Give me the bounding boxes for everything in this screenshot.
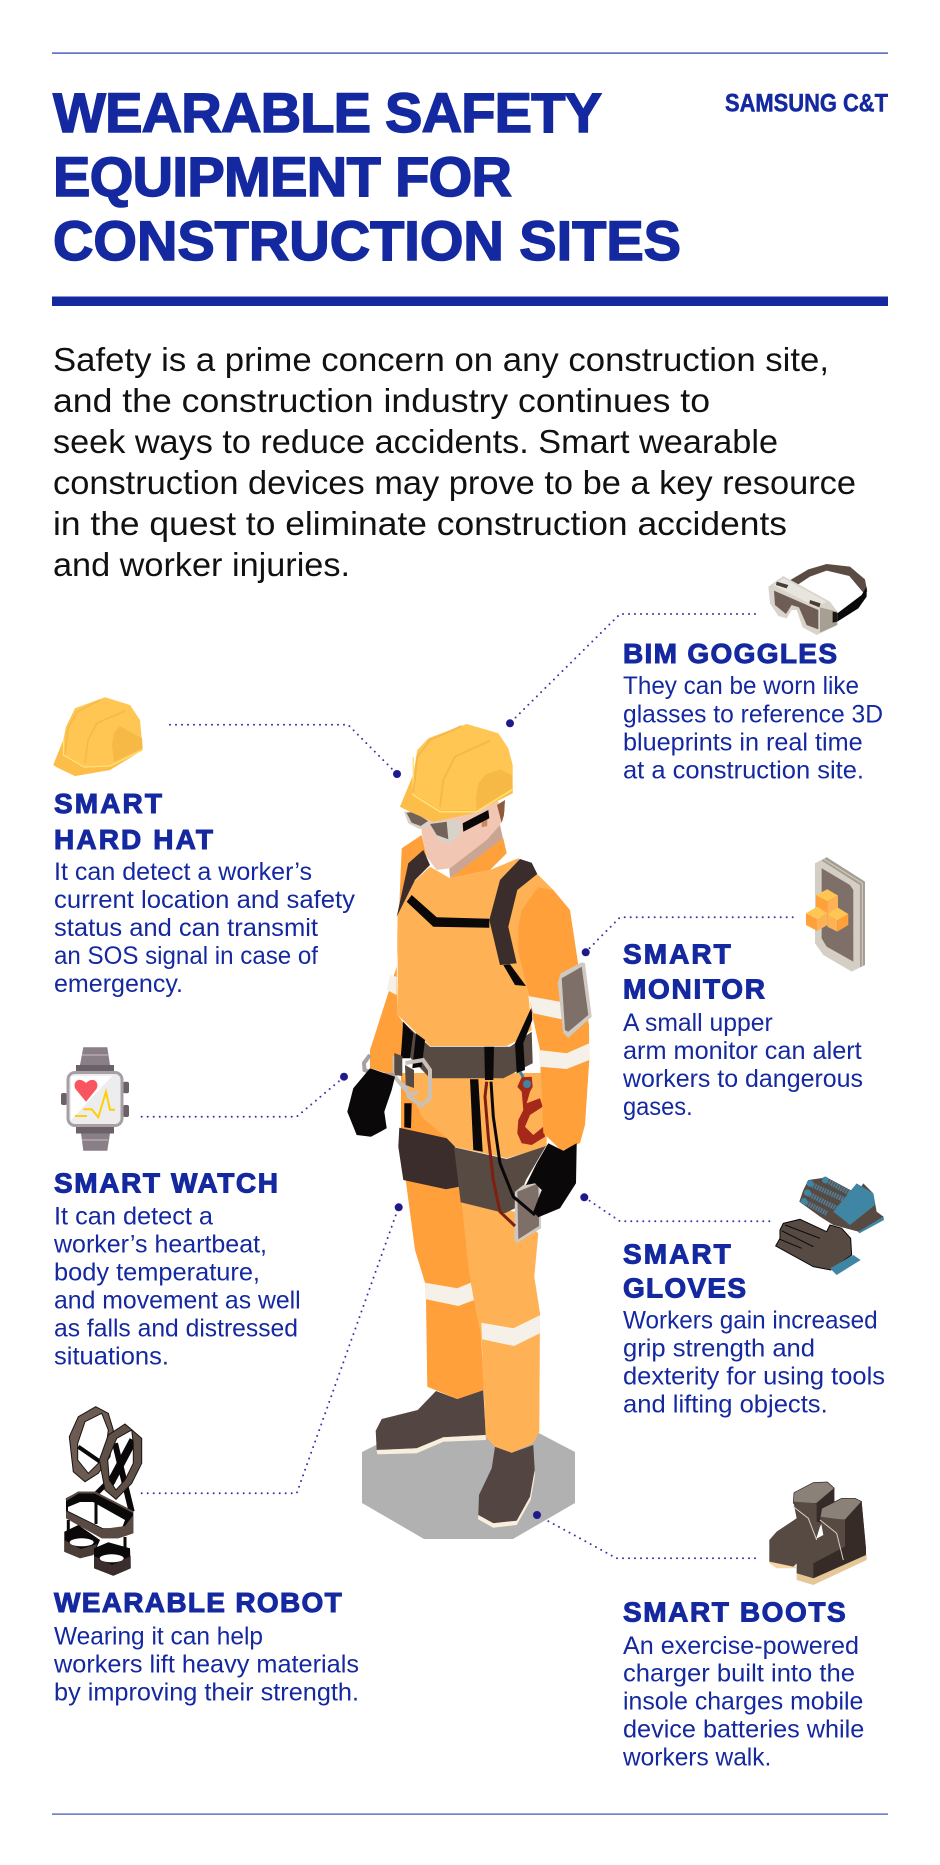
description: workers lift heavy materials <box>53 1650 359 1678</box>
torso vest <box>398 858 553 1046</box>
description: body temperature, <box>54 1258 260 1286</box>
description <box>622 1009 863 1121</box>
description: A small upper <box>623 1009 773 1037</box>
left boot <box>376 1390 486 1454</box>
description <box>53 1622 359 1706</box>
description: arm monitor can alert <box>623 1037 862 1065</box>
heading <box>623 938 765 1005</box>
intro text block: seek ways to reduce accidents. Smart wearable <box>53 423 778 460</box>
description: workers to dangerous <box>622 1065 863 1093</box>
heading: BIM GOGGLES <box>623 638 837 669</box>
title <box>53 81 681 272</box>
panel: smart watch <box>53 1047 301 1370</box>
description: as falls and distressed <box>54 1314 298 1342</box>
description: current location and safety <box>54 886 356 914</box>
description: workers walk. <box>622 1744 771 1772</box>
description: status and can transmit <box>54 914 318 942</box>
description: gases. <box>623 1093 693 1121</box>
heading: MONITOR <box>623 974 765 1005</box>
intro text block: Safety is a prime concern on any construction site, <box>53 341 829 378</box>
phone <box>514 1180 541 1243</box>
icon: hard hat <box>53 697 143 776</box>
panel: smart gloves <box>623 1177 885 1418</box>
right boot <box>478 1445 535 1528</box>
worn hard hat <box>400 724 513 822</box>
description <box>54 858 356 998</box>
description: device batteries while <box>623 1716 864 1744</box>
right leg <box>462 1202 540 1453</box>
right arm <box>518 887 589 1151</box>
title: EQUIPMENT FOR <box>53 145 512 208</box>
description: grip strength and <box>623 1334 815 1362</box>
description: glasses to reference 3D <box>623 700 883 728</box>
description: An exercise-powered <box>623 1632 859 1660</box>
carabiners <box>394 1053 430 1106</box>
description <box>53 1202 301 1370</box>
description: and movement as well <box>54 1286 301 1314</box>
panel: wearable robot <box>53 1407 359 1706</box>
description: They can be worn like <box>623 672 859 700</box>
heading: SMART <box>623 1238 731 1269</box>
description <box>622 1632 864 1772</box>
icon: boots <box>769 1482 867 1585</box>
heading: WEARABLE ROBOT <box>54 1587 342 1618</box>
heading: SMART <box>623 938 731 969</box>
worker figure <box>347 724 592 1528</box>
belt <box>403 1022 533 1078</box>
description: by improving their strength. <box>54 1678 359 1706</box>
panel: smart monitor <box>622 857 865 1121</box>
description: dexterity for using tools <box>623 1362 885 1390</box>
title: CONSTRUCTION SITES <box>53 209 681 272</box>
left leg <box>406 1180 484 1399</box>
description: Workers gain increased <box>623 1306 878 1334</box>
hips <box>401 1073 547 1158</box>
description: an SOS signal in case of <box>54 942 318 970</box>
description: and lifting objects. <box>623 1390 828 1418</box>
icon: monitor with cubes <box>806 857 865 972</box>
arm monitor <box>558 962 592 1038</box>
intro text block: and the construction industry continues to <box>53 382 710 419</box>
description: insole charges mobile <box>623 1688 863 1716</box>
panel: smart hard hat <box>53 697 356 998</box>
description: at a construction site. <box>623 756 864 784</box>
intro text block: construction devices may prove to be a key resource <box>53 464 856 501</box>
icon: exoskeleton <box>64 1407 142 1576</box>
intro text block <box>53 341 856 583</box>
intro text block: in the quest to eliminate construction accidents <box>53 505 787 542</box>
panel: smart boots <box>622 1482 867 1772</box>
intro text block: and worker injuries. <box>53 546 350 583</box>
description <box>623 1306 885 1418</box>
left glove <box>347 1055 395 1137</box>
title: WEARABLE SAFETY <box>53 81 602 144</box>
panel: BIM goggles <box>623 564 883 784</box>
hook <box>517 1072 545 1145</box>
left sleeve and shoulder <box>370 835 427 1076</box>
logo: Samsung C&T: SAMSUNG C&T <box>725 90 888 118</box>
icon: goggles <box>768 564 867 635</box>
thigh straps <box>398 1128 546 1213</box>
description: worker’s heartbeat, <box>53 1230 267 1258</box>
heading: HARD HAT <box>54 824 213 855</box>
leader lines <box>142 614 793 1558</box>
description: Wearing it can help <box>54 1622 263 1650</box>
heading: GLOVES <box>623 1273 746 1304</box>
description: emergency. <box>54 970 183 998</box>
description: It can detect a worker’s <box>54 858 312 886</box>
heading: SMART WATCH <box>54 1168 278 1199</box>
description: It can detect a <box>54 1202 213 1230</box>
right glove <box>526 1143 577 1217</box>
heading: SMART BOOTS <box>623 1597 846 1628</box>
description <box>623 672 883 784</box>
platform under worker <box>362 1418 575 1539</box>
description: charger built into the <box>623 1660 855 1688</box>
description: blueprints in real time <box>623 728 863 756</box>
icon: watch <box>61 1047 129 1151</box>
harness straps <box>397 850 537 1080</box>
heading <box>623 1238 746 1304</box>
head and neck <box>422 790 507 878</box>
icon: gloves <box>776 1177 884 1275</box>
worn goggles <box>404 810 489 844</box>
description: situations. <box>54 1342 169 1370</box>
callout dots <box>340 719 590 1519</box>
cords <box>485 1082 535 1226</box>
heading <box>54 788 213 855</box>
heading: SMART <box>54 788 162 819</box>
